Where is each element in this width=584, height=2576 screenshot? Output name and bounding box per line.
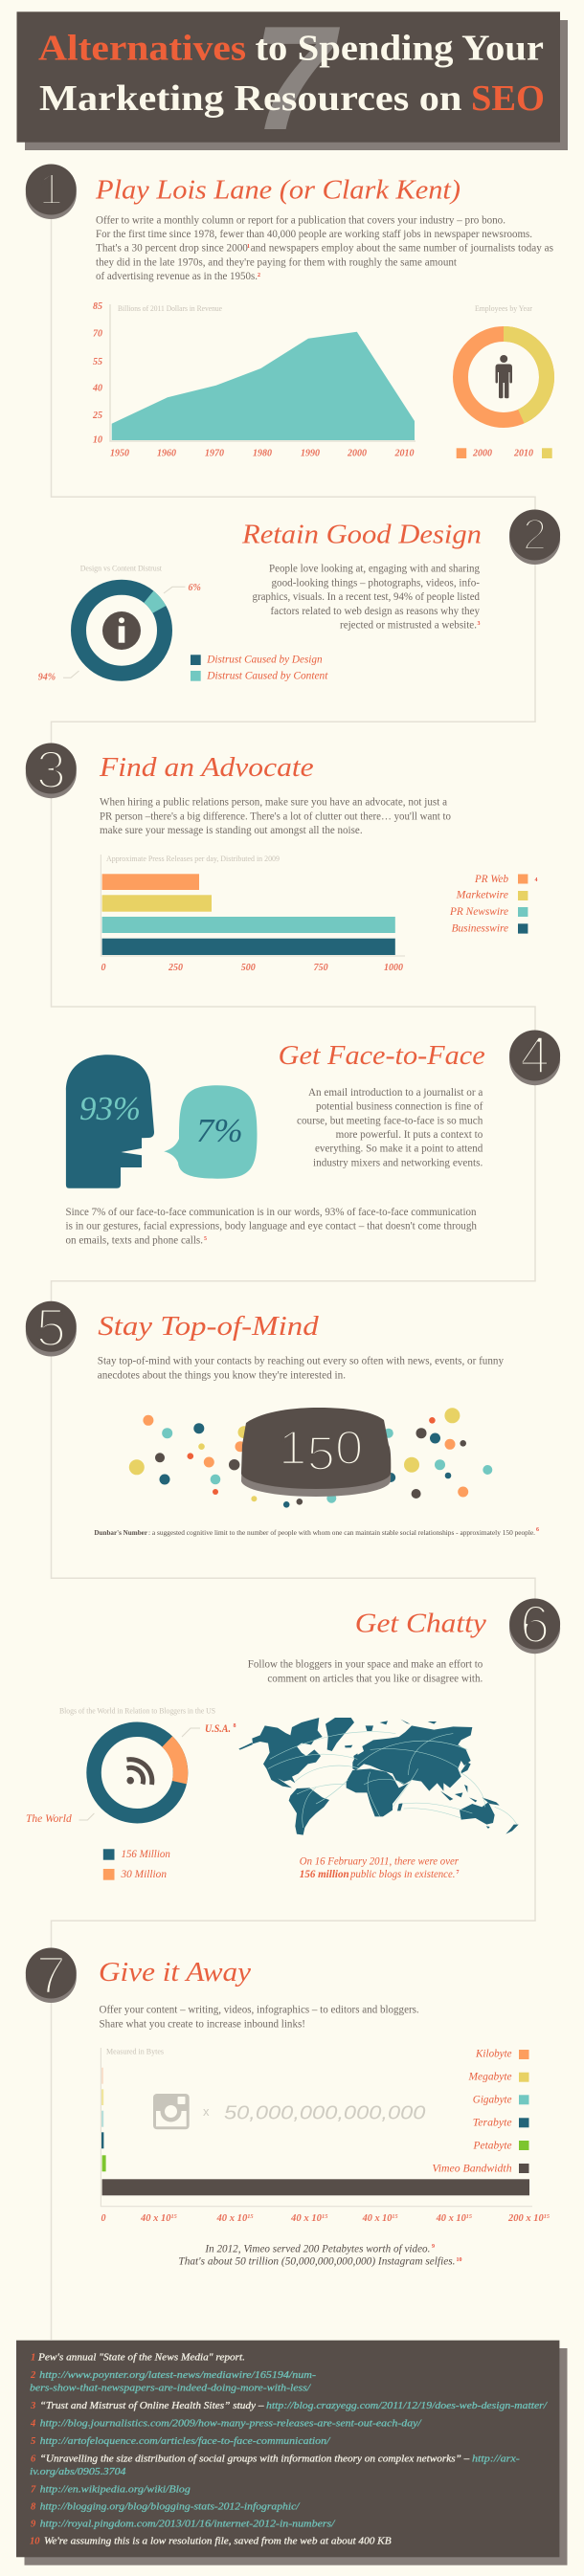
body text 4: An email introduction to a journalist or a xyxy=(308,1087,483,1099)
bar chart: press releases: 500 xyxy=(241,963,256,973)
legend xyxy=(432,2048,528,2174)
body text 7: Share what you create to increase inbound links! xyxy=(100,2018,305,2030)
footnote 1: 1 xyxy=(31,2353,35,2364)
bar chart: press releases: 750 xyxy=(314,963,328,973)
area chart: revenue: 85 xyxy=(93,301,102,312)
bar chart: bytes: 15 xyxy=(247,2214,254,2220)
icon: speaking head xyxy=(66,1055,154,1188)
footnote 3: “Trust and Mistrust of Online Health Sites” study – xyxy=(40,2400,264,2411)
title text: SEO xyxy=(471,78,545,119)
body text 1: of advertising revenue as in the 1950s. xyxy=(96,271,258,282)
badge 1 xyxy=(26,165,77,219)
body text 4: more powerful. It puts a context to xyxy=(336,1129,483,1141)
bar chart: bytes: 15 xyxy=(170,2214,177,2220)
bar chart: press releases: Marketwire xyxy=(456,890,508,901)
heading 3: Find an Advocate xyxy=(99,752,314,783)
donut chart: distrust: Distrust Caused by Content xyxy=(206,670,328,681)
paragraph 4: Since 7% of our face-to-face communication is in our words, 93% of face-to-face communication xyxy=(65,1207,477,1218)
donut chart: distrust: 94% xyxy=(38,673,56,683)
heading 1: Play Lois Lane (or Clark Kent) xyxy=(95,174,460,205)
body text 1 xyxy=(96,214,554,282)
body text 5: anecdotes about the things you know they're interested in. xyxy=(98,1369,346,1381)
body text 6: comment on articles that you like or disagree with. xyxy=(267,1673,483,1684)
section 3 xyxy=(26,739,538,973)
title text: Alternatives xyxy=(38,28,246,68)
body text 2: factors related to web design as reasons why they xyxy=(270,606,480,617)
bar chart: bytes: 15 xyxy=(392,2214,398,2220)
Dunbar's number note: Dunbar's Number xyxy=(94,1528,148,1537)
Dunbar's number note: 6 xyxy=(536,1527,539,1533)
body text 2: 3 xyxy=(477,621,481,627)
heading 7: Give it Away xyxy=(99,1957,251,1988)
badge 5 xyxy=(26,1298,77,1357)
footnote 2: http://www.poynter.org/latest-news/mediawire/165194/num- xyxy=(39,2369,316,2381)
footnote 6: http://arx- xyxy=(472,2453,520,2464)
area chart: revenue: 1960 xyxy=(157,449,176,459)
icon: person xyxy=(496,355,512,398)
footnote 6 xyxy=(30,2453,520,2477)
footnote 6: “Unravelling the size distribution of social groups with information theory on complex networks” – xyxy=(40,2453,470,2464)
big seven: 7 xyxy=(252,0,341,161)
donut chart: employees: Employees by Year xyxy=(475,304,532,313)
icon: info xyxy=(102,611,141,650)
body text 6 xyxy=(248,1659,483,1684)
body text 2 xyxy=(253,564,481,632)
body text 6: Follow the bloggers in your space and make an effort to xyxy=(248,1659,483,1671)
body text 5 xyxy=(98,1356,504,1381)
donut chart: distrust xyxy=(38,565,328,683)
paragraph 4: is in our gestures, facial expressions, body language and eye contact – that doesn't come through xyxy=(65,1221,477,1232)
legend: Vimeo Bandwidth xyxy=(432,2163,512,2174)
bar chart: bytes: 15 xyxy=(322,2214,327,2220)
section 5 xyxy=(26,1298,539,1537)
area chart: revenue: 1980 xyxy=(253,449,272,459)
area chart: revenue: 70 xyxy=(93,329,102,340)
body text 7: Offer your content – writing, videos, infographics – to editors and bloggers. xyxy=(100,2004,419,2015)
section 6 xyxy=(26,1594,560,1880)
footnote 1: Pew's annual "State of the News Media" report. xyxy=(37,2352,245,2364)
bar chart: press releases: 1000 xyxy=(384,963,403,973)
badge 5: 5 xyxy=(36,1298,66,1357)
badge 6: 6 xyxy=(520,1594,550,1654)
donut chart: employees: 2010 xyxy=(513,449,533,459)
donut chart: blogs: Blogs of the World in Relation to Bloggers in the US xyxy=(59,1706,215,1715)
area chart: revenue: 25 xyxy=(92,411,102,421)
donut chart: blogs: U.S.A. xyxy=(205,1723,231,1735)
paragraph 4: 5 xyxy=(204,1236,207,1242)
icon: speech bubble xyxy=(164,1085,257,1179)
map caption xyxy=(300,1855,460,1880)
bar chart: bytes: x xyxy=(203,2104,210,2119)
bar chart: bytes: 200 x 10 xyxy=(508,2213,542,2224)
donut chart: distrust: 6% xyxy=(188,583,201,593)
body text 7 xyxy=(100,2004,419,2030)
footnote 5: http://artofeloquence.com/articles/face-to-face-communication/ xyxy=(40,2435,330,2447)
section 7 xyxy=(16,1944,567,2565)
donut chart: employees xyxy=(457,304,552,459)
body text 1: Offer to write a monthly column or report for a publication that covers your industry – pro bono. xyxy=(96,214,505,226)
icon: rss xyxy=(126,1760,152,1785)
footnote 5: 5 xyxy=(31,2436,35,2447)
body text 4: everything. So make it a point to attend xyxy=(315,1144,483,1155)
title text: to Spending Your xyxy=(255,28,544,68)
footnote 8: 8 xyxy=(31,2501,36,2512)
world map xyxy=(238,1718,519,1835)
icon: speech bubble: 7% xyxy=(196,1112,243,1149)
map caption: 7 xyxy=(456,1870,460,1876)
section 2 xyxy=(38,509,560,683)
bar chart: bytes: 15 xyxy=(466,2214,472,2220)
body text 5: Stay top-of-mind with your contacts by reaching out every so often with news, events, or funny xyxy=(98,1356,504,1367)
footnote 7: http://en.wikipedia.org/wiki/Blog xyxy=(40,2483,191,2495)
body text 3: make sure your message is standing out amongst all the noise. xyxy=(100,825,363,836)
body text 3: When hiring a public relations person, make sure you have an advocate, not just a xyxy=(100,797,447,809)
footnote 4: 4 xyxy=(30,2419,35,2430)
body text 2: rejected or mistrusted a website. xyxy=(340,620,477,632)
chart caption: That's about 50 trillion (50,000,000,000,000) Instagram selfies. xyxy=(178,2256,456,2268)
footnote 3: http://blog.crazyegg.com/2011/12/19/does-web-design-matter/ xyxy=(266,2400,548,2411)
map caption: public blogs in existence. xyxy=(349,1869,456,1880)
badge 4: 4 xyxy=(520,1024,550,1085)
bar chart: press releases: 0 xyxy=(101,963,105,973)
donut chart: employees: 2000 xyxy=(472,449,492,459)
icon: instagram xyxy=(153,2094,190,2129)
badge 7: 7 xyxy=(36,1944,66,2005)
body text 4 xyxy=(297,1087,483,1168)
footnotes panel xyxy=(16,2341,567,2565)
donut chart: blogs xyxy=(26,1706,236,1880)
footnote 8: http://blogging.org/blog/blogging-stats-2012-infographic/ xyxy=(40,2500,300,2512)
bar chart: press releases: Businesswire xyxy=(452,922,508,934)
donut chart: distrust: Distrust Caused by Design xyxy=(206,655,323,666)
footnote 2 xyxy=(30,2369,316,2394)
body text 4: potential business connection is fine of xyxy=(316,1101,483,1113)
footnote 6: iv.org/abs/0905.3704 xyxy=(30,2466,126,2477)
body text 4: industry mixers and networking events. xyxy=(313,1157,483,1168)
blob: 150: 0 xyxy=(335,1421,363,1475)
chart caption: 9 xyxy=(432,2244,435,2250)
area chart: revenue: Billions of 2011 Dollars in Revenue xyxy=(118,304,222,313)
badge 4 xyxy=(509,1024,560,1085)
footnote 4: http://blog.journalistics.com/2009/how-many-press-releases-are-sent-out-each-day/ xyxy=(40,2418,422,2430)
blob: 150 xyxy=(241,1408,391,1497)
footnote 7: 7 xyxy=(31,2484,36,2495)
body text 1: For the first time since 1978, fewer than 40,000 people are working staff jobs in newspaper newsrooms. xyxy=(96,229,532,240)
badge 7 xyxy=(26,1944,77,2005)
heading 6: Get Chatty xyxy=(355,1609,486,1639)
body text 1: 2 xyxy=(258,273,260,278)
legend: Terabyte xyxy=(473,2117,512,2128)
bar chart: bytes: 15 xyxy=(544,2214,550,2220)
body text 1: they did in the late 1970s, and they're paying for them with roughly the same amount xyxy=(96,256,458,268)
donut chart: distrust: Design vs Content Distrust xyxy=(80,565,163,573)
footnote 3 xyxy=(30,2400,548,2411)
area chart: revenue: 1970 xyxy=(205,449,224,459)
donut chart: blogs: 30 Million xyxy=(121,1869,167,1880)
bar chart: press releases xyxy=(101,855,538,973)
body text 4: course, but meeting face-to-face is so much xyxy=(297,1115,483,1126)
bar chart: bytes: 40 x 10 xyxy=(437,2213,465,2224)
legend: Megabyte xyxy=(468,2071,512,2082)
paragraph 4: on emails, texts and phone calls. xyxy=(65,1234,203,1246)
footnote 9: http://royal.pingdom.com/2013/01/16/internet-2012-in-numbers/ xyxy=(40,2519,335,2530)
area chart: revenue: 2010 xyxy=(394,449,414,459)
bar chart: bytes: 0 xyxy=(101,2213,105,2224)
bar chart: press releases: Approximate Press Releases per day, Distributed in 2009 xyxy=(106,855,280,863)
body text 3: PR person –there's a big difference. There's a lot of clutter out there… you'll want to xyxy=(100,811,451,822)
body text 2: People love looking at, engaging with and sharing xyxy=(269,564,480,575)
area chart: revenue: 1990 xyxy=(301,449,320,459)
legend: Petabyte xyxy=(473,2140,512,2151)
body text 3 xyxy=(100,797,451,836)
badge 1: 1 xyxy=(39,165,63,214)
bar chart: bytes: 40 x 10 xyxy=(141,2213,169,2224)
title text: Marketing Resources on xyxy=(39,78,461,119)
section 4 xyxy=(65,1024,560,1246)
body text 1: 1 xyxy=(247,244,250,250)
badge 3 xyxy=(26,739,77,800)
icon: speaking head: 93% xyxy=(79,1090,141,1127)
Dunbar's number note: : a suggested cognitive limit to the number of people with whom one can maintain stable social relationships - approximately 150 people. xyxy=(148,1528,535,1537)
area chart: revenue: 10 xyxy=(93,435,102,446)
donut chart: blogs: 156 Million xyxy=(121,1849,170,1860)
body text 1: That's a 30 percent drop since 2000 and newspapers employ about the same number of journalists today as xyxy=(96,243,554,255)
paragraph 4 xyxy=(65,1207,477,1246)
badge 6 xyxy=(509,1594,560,1654)
area chart: revenue: 40 xyxy=(92,384,102,394)
bar chart: bytes: 40 x 10 xyxy=(216,2213,245,2224)
area chart: revenue: 55 xyxy=(93,357,102,367)
donut chart: blogs: 8 xyxy=(234,1723,236,1729)
legend: Kilobyte xyxy=(475,2048,512,2059)
footnote 10: We're assuming this is a low resolution file, saved from the web at about 400 KB xyxy=(44,2536,392,2547)
title banner xyxy=(17,0,568,161)
bar chart: bytes: Measured in Bytes xyxy=(106,2048,164,2056)
bar chart: press releases: PR Newswire xyxy=(449,906,508,918)
heading 2: Retain Good Design xyxy=(241,520,482,550)
chart caption: In 2012, Vimeo served 200 Petabytes worth of video. xyxy=(204,2243,430,2254)
dots cluster xyxy=(129,1408,492,1508)
chart caption: 10 xyxy=(456,2257,461,2263)
bar chart: press releases: 250 xyxy=(168,963,183,973)
footnote 9: 9 xyxy=(31,2520,36,2530)
bar chart: press releases: PR Web xyxy=(474,874,508,885)
body text 2: good-looking things – photographs, videos, info- xyxy=(272,577,480,588)
blob: 150: 5 xyxy=(306,1427,335,1480)
footnote 2: 2 xyxy=(30,2370,36,2381)
instagram selfie count: 50,000,000,000,000 xyxy=(224,2102,425,2123)
map caption: On 16 February 2011, there were over xyxy=(300,1855,459,1867)
heading 5: Stay Top-of-Mind xyxy=(98,1311,319,1342)
footnote 2: bers-show-that-newspapers-are-indeed-doing-more-with-less/ xyxy=(30,2383,311,2394)
badge 2: 2 xyxy=(523,509,547,559)
title text xyxy=(38,28,545,119)
area chart: revenue xyxy=(92,301,416,459)
footnote 10: 10 xyxy=(30,2537,40,2547)
badge 2 xyxy=(509,509,560,565)
bar chart: bytes: 40 x 10 xyxy=(363,2213,392,2224)
footnote 6: 6 xyxy=(31,2454,36,2464)
area chart: revenue: 1950 xyxy=(110,449,129,459)
bar chart: bytes xyxy=(101,2048,550,2224)
area chart: revenue: 2000 xyxy=(347,449,367,459)
map caption: 156 million xyxy=(300,1869,349,1880)
donut chart: blogs: The World xyxy=(26,1813,72,1825)
footnote 3: 3 xyxy=(30,2401,35,2411)
bar chart: bytes: 40 x 10 xyxy=(291,2213,320,2224)
heading 4: Get Face-to-Face xyxy=(279,1040,485,1071)
badge 3: 3 xyxy=(36,739,66,800)
legend: Gigabyte xyxy=(473,2094,512,2105)
body text 2: graphics, visuals. In a recent test, 94% of people listed xyxy=(253,591,480,603)
blob: 150: 1 xyxy=(279,1421,305,1475)
section 1 xyxy=(26,165,554,459)
chart caption xyxy=(178,2243,461,2268)
bar chart: press releases: 4 xyxy=(534,877,538,883)
